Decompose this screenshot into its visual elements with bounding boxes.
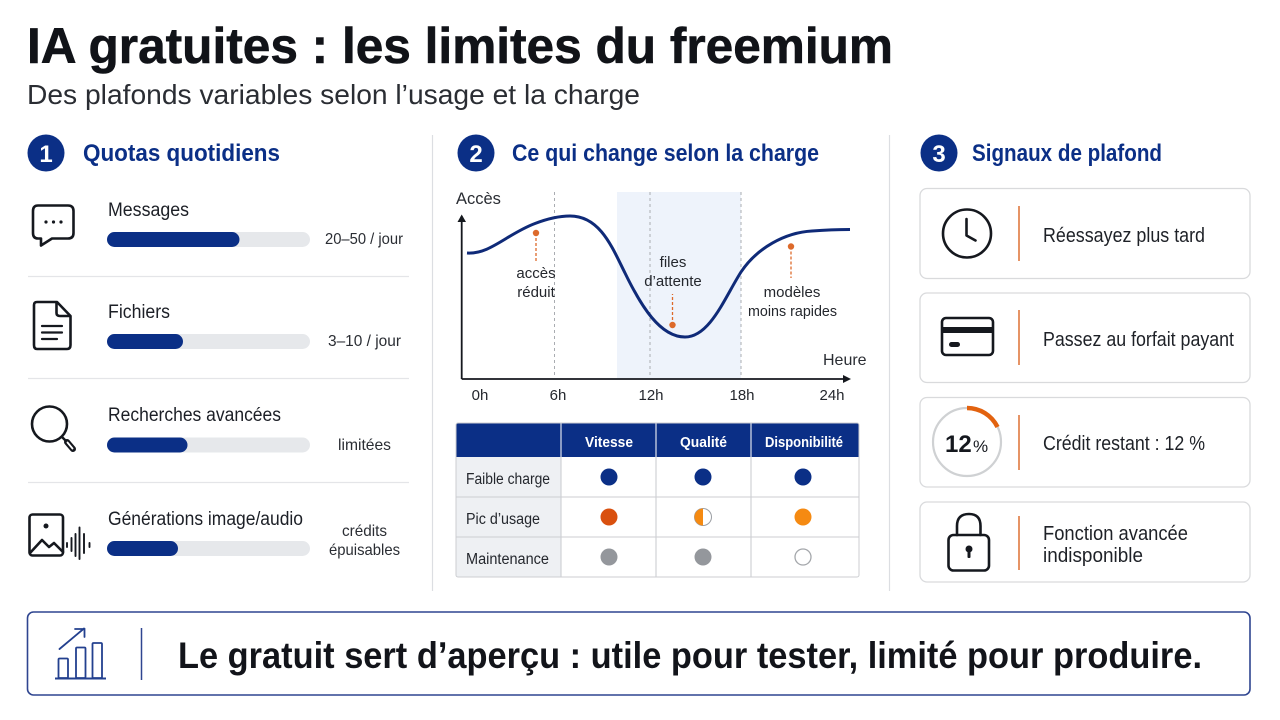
- card: fonction avancee indisponible: Fonction avancée: [1043, 523, 1188, 545]
- table: impact selon la charge: Faible charge: [466, 471, 550, 488]
- progress bar: [107, 232, 310, 247]
- row: recherches avancees: Recherches avancées: [108, 405, 281, 426]
- progress bar: [107, 541, 310, 556]
- table: impact selon la charge: Maintenance: [466, 551, 549, 568]
- icon: clock: [943, 210, 991, 258]
- heading: quotas quotidiens: Quotas quotidiens: [83, 140, 280, 167]
- axis labels: Heure: [823, 352, 867, 369]
- table: impact selon la charge: Disponibilité: [765, 435, 843, 451]
- annotation: files d'attente: files: [660, 254, 686, 271]
- card: credit restant: [920, 398, 1250, 487]
- heading: quotas quotidiens: [28, 134, 280, 172]
- annotation: acces reduit: accès: [516, 265, 556, 282]
- row: generations image/audio: Générations image/audio: [108, 509, 303, 530]
- annotation: modeles moins rapides: modèles: [764, 284, 820, 301]
- table: impact selon la charge: Qualité: [680, 435, 727, 451]
- heading: ce qui change: Ce qui change selon la charge: [512, 140, 819, 167]
- annotation: modeles moins rapides: [748, 243, 837, 320]
- card: reessayez plus tard: Réessayez plus tard: [1043, 225, 1205, 247]
- title: IA gratuites : les limites du freemium: [27, 18, 893, 74]
- annotation: modeles moins rapides: moins rapides: [748, 303, 837, 320]
- icon: gauge 12 %: %: [973, 437, 988, 456]
- axis labels: [456, 190, 867, 404]
- row: generations image/audio: épuisables: [329, 542, 400, 559]
- heading: quotas quotidiens: 1: [39, 141, 53, 168]
- card: credit restant: Crédit restant : 12 %: [1043, 433, 1205, 455]
- banner: takeaway: [28, 612, 1250, 695]
- icon: speech bubble: [33, 206, 74, 246]
- icon: credit card: [942, 318, 993, 355]
- annotation: files d'attente: d’attente: [644, 273, 702, 290]
- panel: ce qui change selon la charge: [456, 134, 867, 577]
- icon: rising bar chart: [55, 628, 106, 678]
- table: impact selon la charge: Vitesse: [585, 435, 633, 451]
- heading: signaux de plafond: 3: [932, 141, 946, 168]
- takeaway text: Le gratuit sert d’aperçu : utile pour tester, limité pour produire.: [178, 635, 1202, 676]
- table: impact selon la charge: Pic d’usage: [466, 511, 540, 528]
- half filled circle: [694, 508, 712, 526]
- heading: signaux de plafond: Signaux de plafond: [972, 140, 1162, 167]
- axis labels: 12h: [638, 387, 664, 404]
- axis labels: 24h: [819, 387, 845, 404]
- icon: padlock: [948, 514, 989, 570]
- panel: signaux de plafond: [920, 134, 1250, 582]
- heading: ce qui change: 2: [469, 141, 483, 168]
- card: passez au forfait payant: [920, 293, 1250, 382]
- curve: [467, 216, 850, 337]
- annotation: acces reduit: [516, 230, 556, 301]
- line chart: acces par heure: [456, 190, 867, 404]
- panel: quotas quotidiens: [28, 134, 409, 559]
- icon: magnifier: [32, 406, 73, 449]
- heading: ce qui change: [458, 134, 819, 172]
- icon: document: [34, 302, 70, 349]
- annotation: acces reduit: réduit: [517, 284, 556, 301]
- row: fichiers: Fichiers: [108, 302, 170, 323]
- row: generations image/audio: crédits: [342, 523, 387, 540]
- axis labels: 18h: [729, 387, 755, 404]
- icon: gauge 12 %: [933, 408, 1001, 476]
- icon: gauge 12 %: 12: [945, 431, 972, 458]
- row: fichiers: [34, 302, 402, 350]
- heading: signaux de plafond: [920, 134, 1162, 172]
- card: fonction avancee indisponible: [920, 502, 1250, 582]
- card: fonction avancee indisponible: indisponible: [1043, 545, 1143, 567]
- row: generations image/audio: [30, 509, 400, 559]
- row: recherches avancees: limitées: [338, 437, 391, 454]
- subtitle: Des plafonds variables selon l’usage et la charge: [27, 79, 640, 110]
- progress bar: [107, 438, 310, 452]
- axis labels: Accès: [456, 190, 501, 208]
- annotation: files d'attente: [644, 254, 702, 328]
- axis labels: 6h: [550, 387, 566, 404]
- table: impact selon la charge: [456, 423, 859, 577]
- row: messages: 20–50 / jour: [325, 231, 404, 248]
- card: reessayez plus tard: [920, 188, 1250, 278]
- row: messages: Messages: [108, 200, 189, 221]
- row: fichiers: 3–10 / jour: [328, 333, 402, 350]
- icon: image and sound wave: [30, 514, 90, 559]
- card: passez au forfait payant: Passez au forfait payant: [1043, 329, 1234, 351]
- progress bar: [107, 334, 310, 349]
- axis labels: 0h: [472, 387, 488, 404]
- row: recherches avancees: [32, 405, 391, 454]
- row: messages: [33, 200, 404, 248]
